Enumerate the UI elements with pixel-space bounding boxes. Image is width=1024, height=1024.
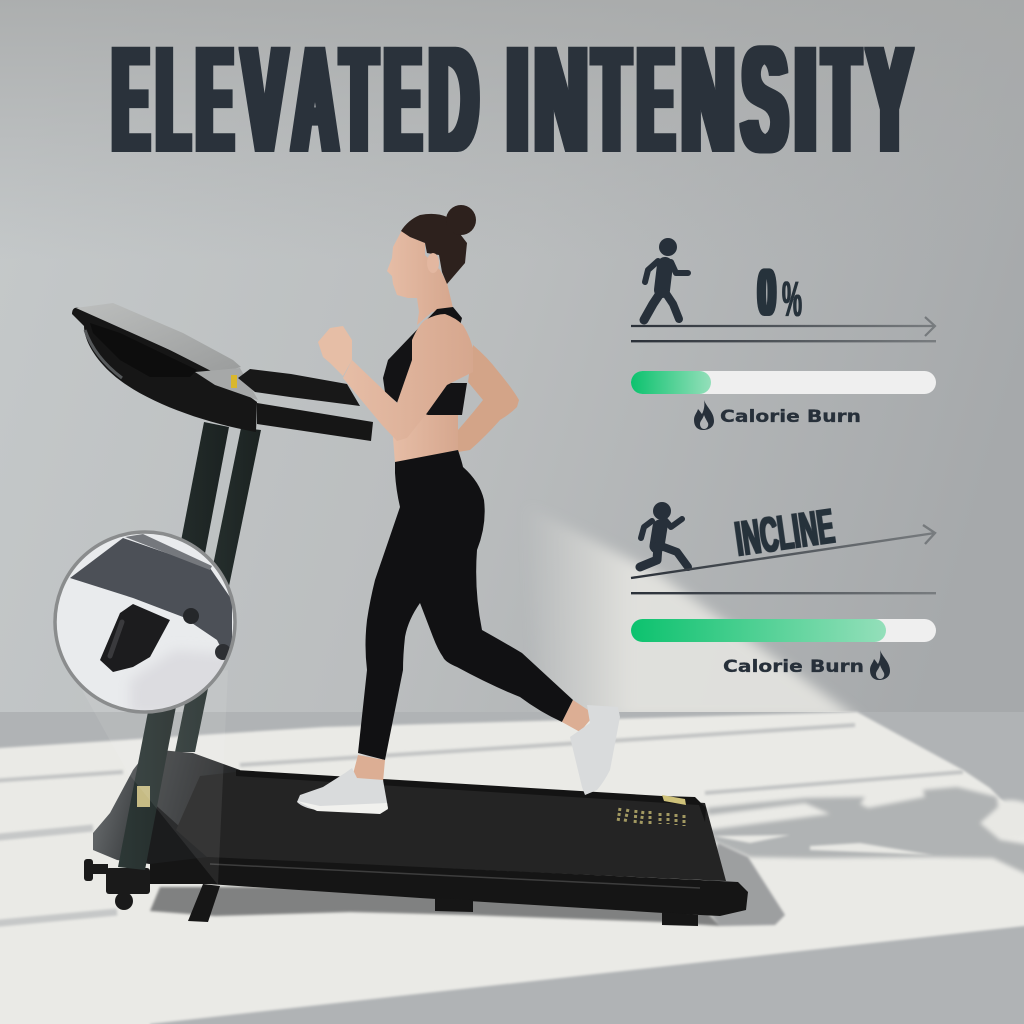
console bow: [72, 308, 257, 432]
leggings: [358, 450, 573, 760]
light gaps in shadow: [713, 835, 933, 855]
silver neck strip: [195, 368, 258, 400]
title: N: [682, 15, 734, 183]
wall background: [0, 0, 1024, 720]
title: I: [794, 15, 817, 183]
upper handlebar: [238, 369, 360, 406]
cover dark flank: [130, 800, 210, 864]
hair bun: [446, 205, 476, 235]
title: V: [243, 15, 286, 183]
treadmill feet: [188, 884, 698, 926]
gold belt lettering: [618, 808, 684, 826]
treadmill belt: [176, 772, 726, 881]
icon: walking figure: [644, 238, 688, 320]
folding bracket plate: [70, 538, 232, 648]
title: D: [429, 15, 478, 183]
ground line: [631, 340, 936, 342]
thin floor stripes: [0, 725, 963, 793]
icon: running figure: [640, 502, 688, 567]
lens floor shade: [131, 652, 224, 710]
infographic canvas: Y: [868, 15, 911, 183]
yellow stickers: [662, 795, 725, 893]
treadmill floor shadow: [150, 843, 785, 926]
knob highlight: [110, 622, 122, 656]
panel: incline: [631, 500, 936, 680]
title: N: [535, 15, 587, 183]
title: [113, 15, 911, 183]
window silhouette shadow on floor: [707, 787, 1024, 890]
upright sticker: [137, 786, 150, 807]
title: L: [157, 15, 189, 183]
incline arrow: [631, 525, 935, 578]
calorie bar: [631, 619, 936, 642]
rail highlight: [210, 864, 700, 888]
title: T: [594, 15, 629, 183]
midriff: [393, 410, 458, 463]
calorie burn label: Calorie Burn: [723, 657, 864, 677]
front arm: [343, 314, 473, 441]
magnified detail lens: [50, 530, 240, 720]
bolt: [183, 608, 199, 624]
title: E: [385, 15, 420, 183]
panel: flat 0%: %: [782, 271, 802, 327]
front ankle: [352, 755, 385, 782]
magnifier projection cone: [82, 670, 228, 885]
console inner recess: [90, 323, 197, 377]
title: E: [638, 15, 673, 183]
icon: flame: [870, 650, 890, 680]
treadmill: [72, 303, 748, 926]
incline label: INCLINE: [732, 500, 838, 567]
back shoe: [570, 705, 620, 795]
ear: [427, 253, 439, 273]
lens ring: [55, 532, 235, 712]
flat arrow: [631, 317, 935, 336]
title: T: [824, 15, 859, 183]
title: S: [742, 15, 787, 183]
lens interior: [56, 534, 234, 710]
wide floor stripes: [0, 828, 117, 924]
bow rim highlight: [85, 330, 122, 378]
calorie bar: [631, 371, 936, 394]
castor assembly: [84, 859, 150, 910]
calorie burn label: Calorie Burn: [720, 407, 861, 427]
knob foot: [100, 604, 170, 672]
panel: flat 0%: [631, 238, 936, 430]
belt far rail and end cap: [236, 770, 706, 822]
treadmill side rail: [150, 857, 748, 916]
fist: [318, 326, 352, 376]
deck grille: [125, 534, 212, 570]
floor with sunlight bands: [0, 712, 1024, 1024]
hair: [401, 214, 467, 284]
rear arm: [458, 345, 519, 452]
title: A: [293, 15, 337, 183]
panel: flat 0%: 0: [758, 255, 776, 329]
treadmill front upright: [118, 422, 229, 870]
title: E: [113, 15, 148, 183]
sports bra: [383, 307, 467, 415]
console silver panel: [76, 303, 241, 374]
sunlit floor: [0, 712, 1024, 1024]
ground line: [631, 592, 936, 594]
title: T: [342, 15, 376, 183]
console yellow key: [231, 375, 237, 388]
front shoe: [297, 768, 388, 813]
treadmill motor cover: [93, 750, 241, 864]
icon: flame: [694, 400, 714, 430]
title: I: [506, 15, 529, 183]
runner: [297, 205, 620, 814]
lower bolt: [215, 644, 231, 660]
front shoe sole: [297, 801, 388, 814]
treadmill rear upright: [175, 428, 261, 752]
back ankle: [562, 700, 590, 732]
lower handlebar: [257, 403, 373, 441]
sun patch right: [980, 800, 1024, 838]
title: E: [197, 15, 232, 183]
neck and face: [387, 230, 453, 325]
